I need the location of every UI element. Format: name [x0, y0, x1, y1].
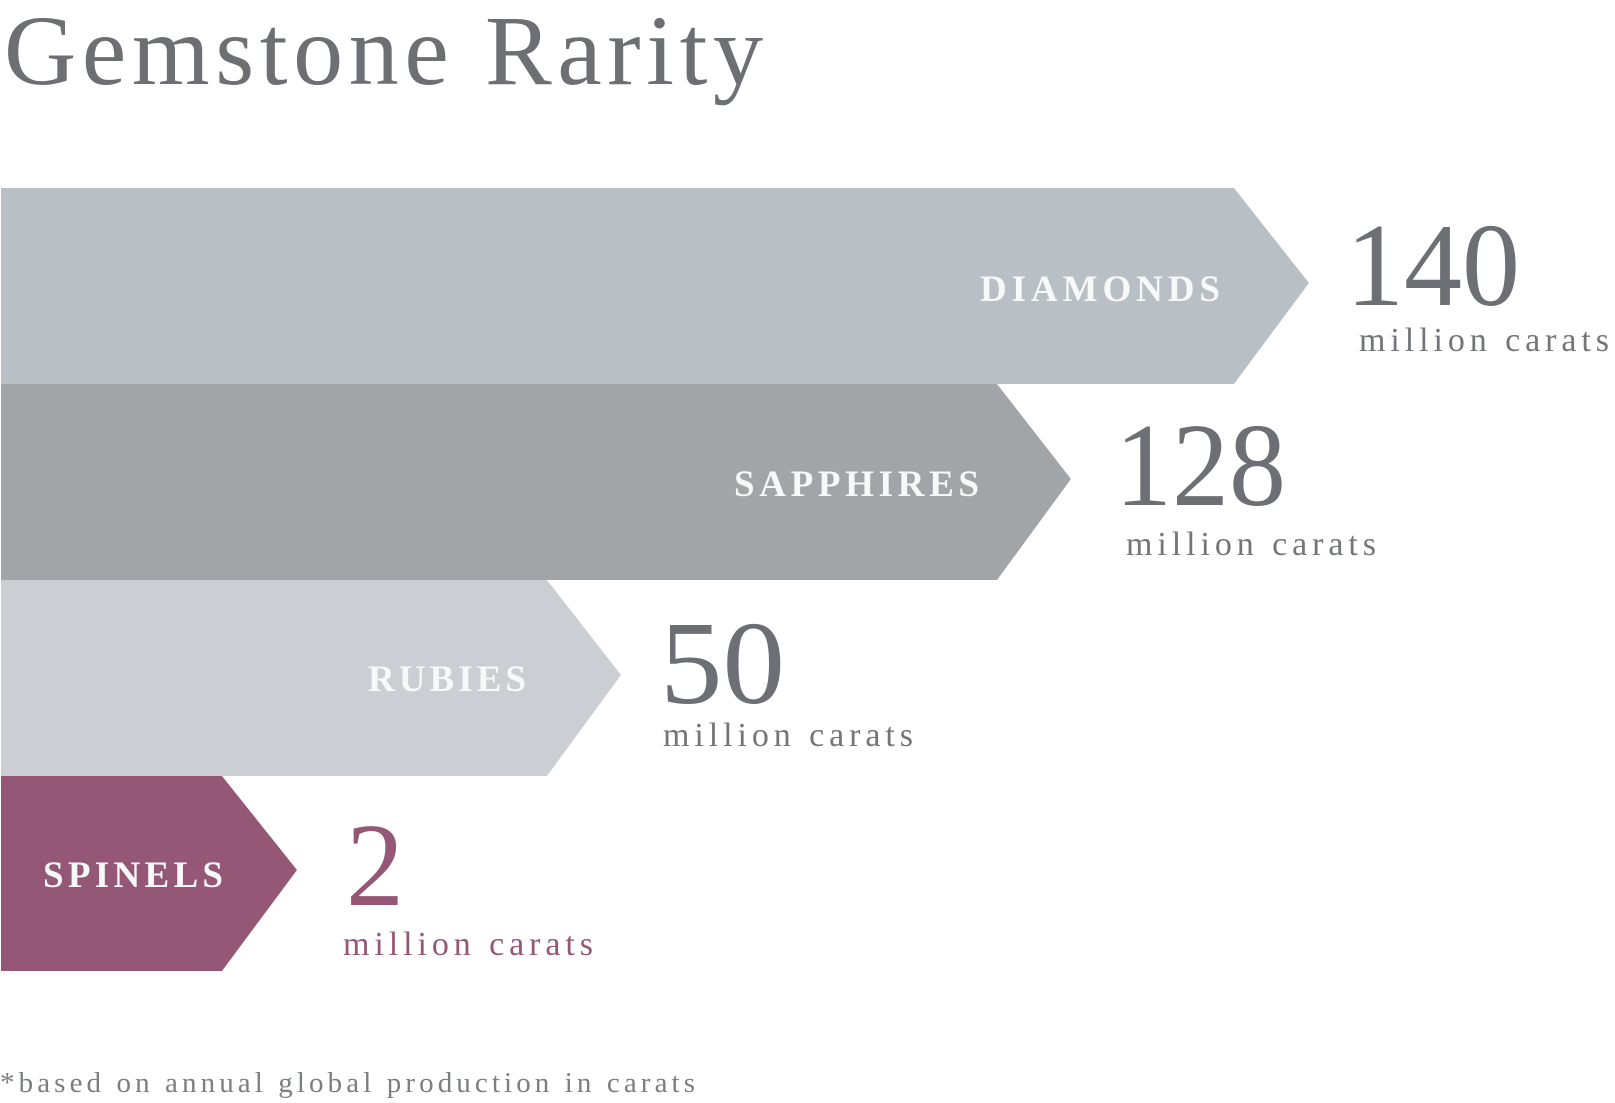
row: spinels [1, 776, 593, 971]
value: 128: 128 [1115, 399, 1286, 531]
arrow bar: diamonds [1, 188, 1309, 384]
label: rubies: RUBIES [368, 659, 526, 700]
arrow bar: rubies [1, 580, 621, 776]
value: 2: 2 [346, 799, 404, 931]
unit: sapphires: million carats [1126, 526, 1376, 563]
label: diamonds: DIAMONDS [980, 269, 1220, 310]
label: sapphires: SAPPHIRES [734, 464, 979, 505]
label: spinels: SPINELS [43, 855, 223, 896]
unit: diamonds: million carats [1359, 322, 1609, 359]
row: sapphires [1, 384, 1376, 580]
value: 50: 50 [660, 597, 785, 729]
arrow bar: spinels [1, 776, 297, 971]
value: 140: 140 [1346, 199, 1520, 331]
footnote: *based on annual global production in carats [0, 1067, 695, 1099]
arrow bar: sapphires [1, 384, 1071, 580]
unit: spinels: million carats [343, 926, 593, 963]
unit: rubies: million carats [663, 717, 913, 754]
row: rubies [1, 580, 913, 776]
row: diamonds [1, 188, 1609, 384]
